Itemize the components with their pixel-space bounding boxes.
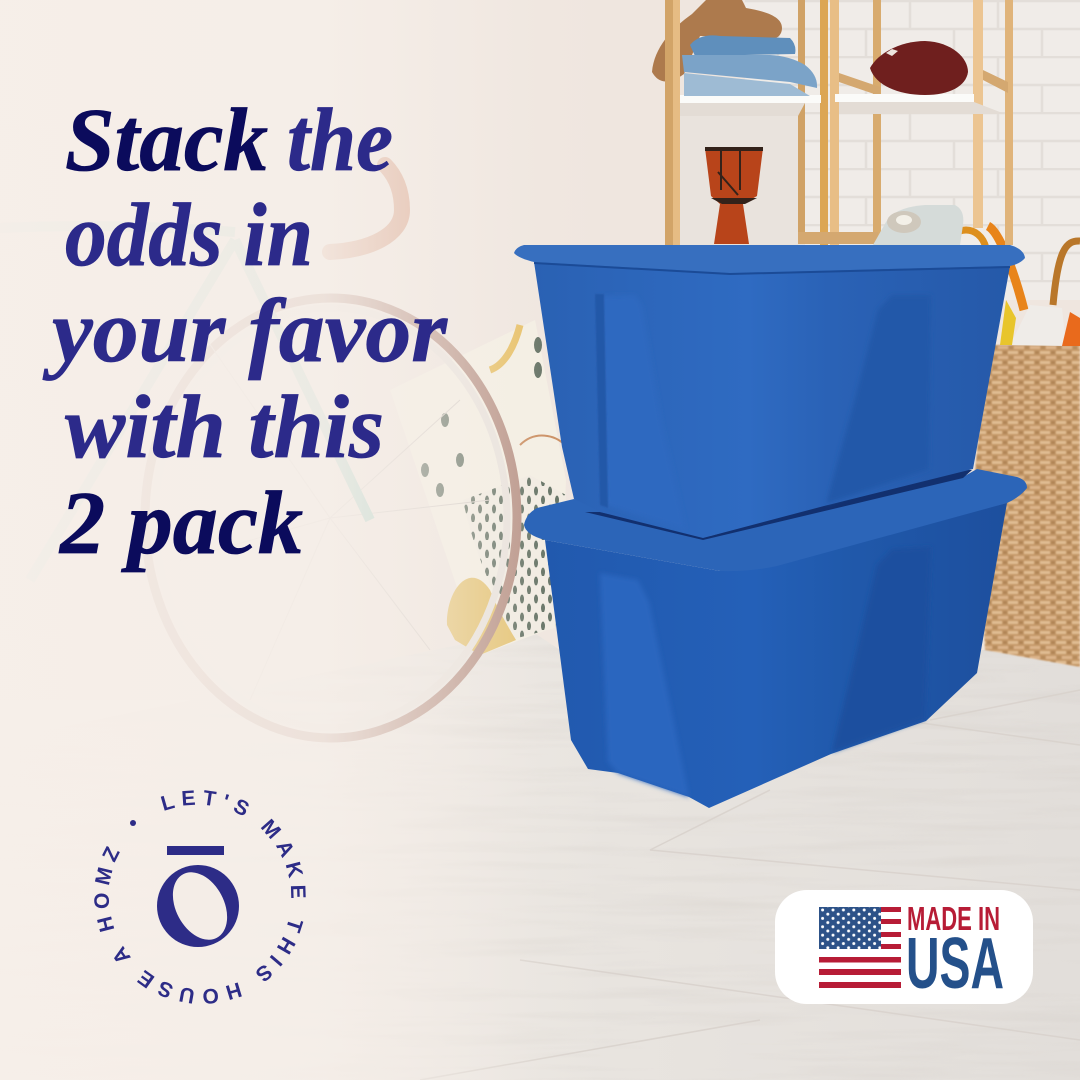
top tote bbox=[514, 245, 1025, 538]
line 4: with this bbox=[65, 378, 384, 477]
logo ring bbox=[157, 863, 239, 949]
folded jeans bbox=[682, 35, 817, 96]
brick wall bbox=[745, 0, 1080, 300]
bamboo shelf bbox=[665, 0, 1013, 245]
headline bbox=[42, 91, 448, 573]
made in usa badge bbox=[775, 890, 1033, 1004]
shelf boards bbox=[680, 95, 821, 103]
hat bbox=[652, 0, 782, 82]
top tote body bbox=[534, 262, 1010, 538]
bottom tote body bbox=[545, 503, 1007, 808]
american flag bbox=[819, 907, 901, 988]
line 5: 2 pack bbox=[58, 474, 303, 573]
stacked blue totes bbox=[514, 245, 1027, 808]
circular slogan: LET'S MAKE THIS HOUSE A HOMZ bbox=[94, 790, 306, 1004]
bottom tote left recess bbox=[600, 573, 689, 797]
wicker basket bbox=[975, 345, 1080, 667]
line 3: your favor bbox=[42, 282, 448, 381]
gap shadow between totes bbox=[585, 470, 972, 540]
djembe drum bbox=[705, 147, 763, 244]
dot separator bbox=[130, 820, 136, 826]
usa text: USA bbox=[906, 924, 1004, 1004]
line 2: odds in bbox=[65, 186, 313, 285]
floor bbox=[0, 630, 1080, 1080]
made in text: MADE IN bbox=[907, 900, 1000, 937]
top tote lid bbox=[514, 245, 1025, 273]
floor planks bbox=[420, 690, 1080, 1080]
badge background bbox=[775, 890, 1033, 1004]
bicycle bbox=[0, 165, 517, 738]
football bbox=[870, 41, 968, 95]
wall bbox=[0, 0, 1080, 700]
logo bar bbox=[167, 846, 224, 855]
bottom tote lid bbox=[524, 469, 1027, 571]
line 1: the bbox=[287, 91, 393, 190]
circular brand logo bbox=[94, 790, 306, 1004]
line 1: Stack bbox=[65, 91, 268, 190]
floor wood grain bbox=[0, 620, 1080, 1080]
top tote right recess bbox=[826, 295, 931, 504]
rotary telephone bbox=[873, 205, 963, 245]
umbrellas and paper bbox=[946, 226, 1080, 346]
bottom tote right recess bbox=[832, 547, 931, 752]
bottom tote bbox=[524, 469, 1027, 808]
line 1 bbox=[65, 91, 393, 190]
top tote left recess bbox=[600, 295, 686, 530]
canvas art leaning bbox=[390, 320, 566, 655]
